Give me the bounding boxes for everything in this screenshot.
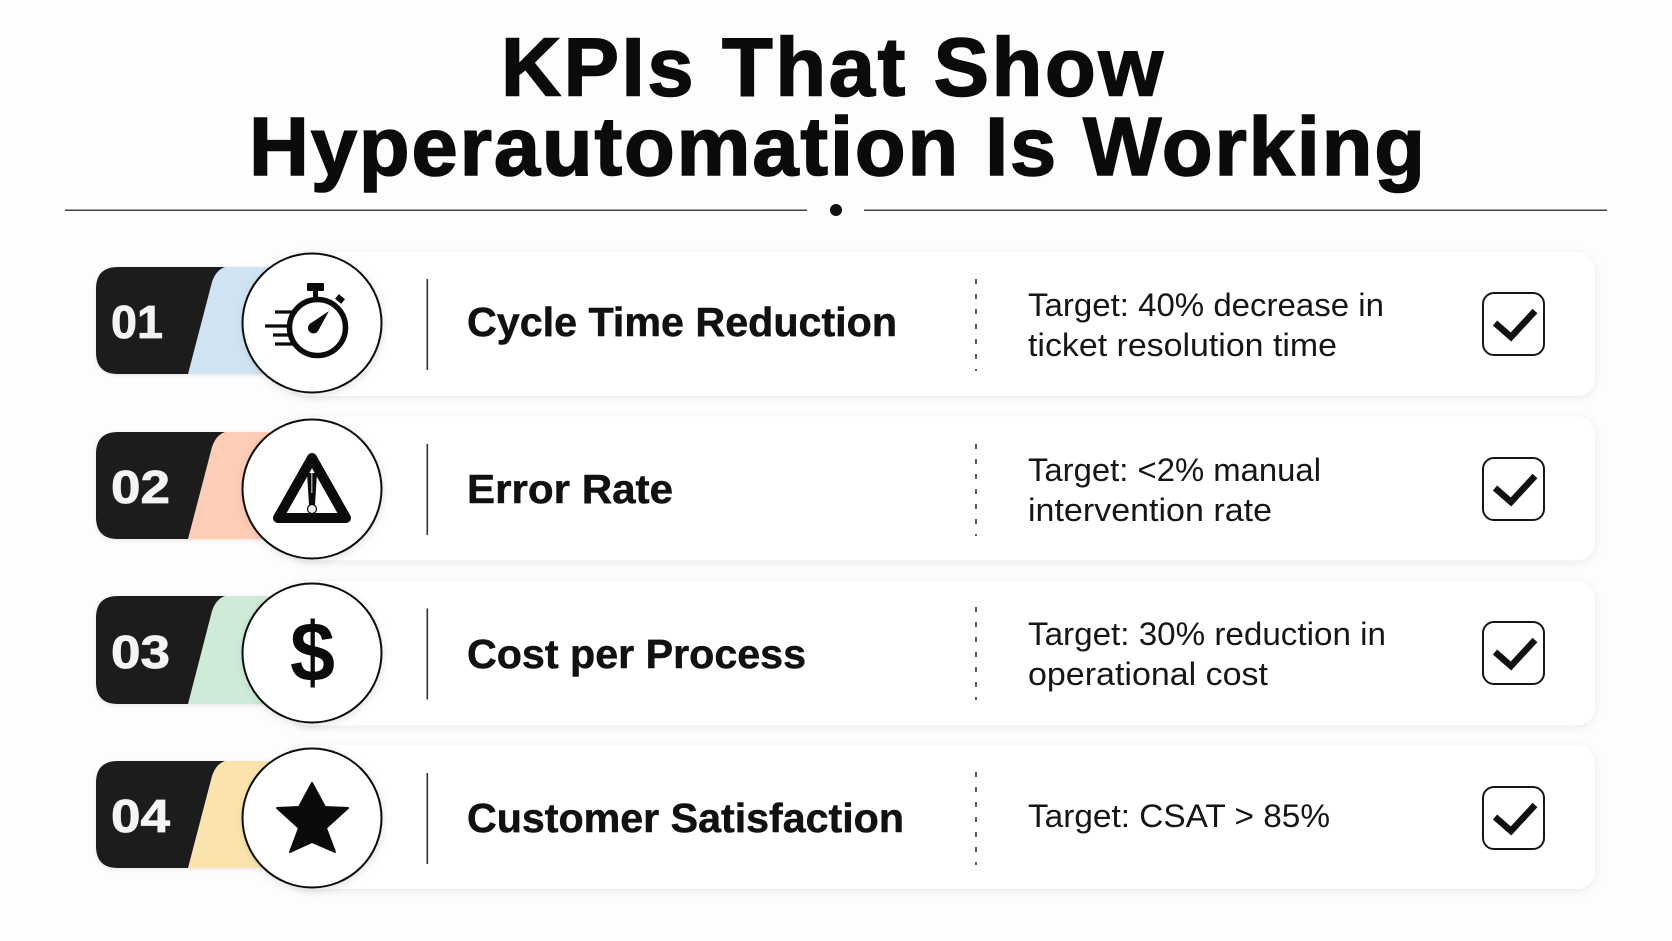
dashed divider	[975, 607, 977, 700]
title	[249, 20, 1425, 193]
icon: warning triangle	[242, 420, 382, 558]
dashed divider	[975, 772, 977, 865]
label: Cost per Process	[467, 631, 806, 677]
number badge 01: 01	[111, 296, 163, 348]
icon: checkbox	[1483, 622, 1544, 684]
icon: checkbox	[1483, 787, 1544, 849]
divider	[426, 773, 428, 864]
card 02	[290, 416, 1595, 560]
dashed divider	[975, 279, 977, 371]
label: Cycle Time Reduction	[467, 299, 897, 345]
target text: operational cost	[1028, 656, 1268, 692]
divider	[426, 608, 428, 700]
number badge 04: 04	[111, 790, 170, 842]
panel: KPI 02 error rate	[96, 416, 1595, 560]
card 03	[290, 581, 1595, 726]
icon: checkbox	[1483, 458, 1544, 520]
target text	[1028, 452, 1321, 528]
icon: checkbox	[1483, 293, 1544, 355]
label: Customer Satisfaction	[467, 795, 904, 841]
divider	[426, 444, 428, 535]
number badge 02	[96, 432, 312, 539]
card 04	[290, 745, 1595, 889]
icon: stopwatch	[242, 254, 382, 392]
target text	[1028, 287, 1384, 363]
title divider	[65, 204, 1607, 216]
icon: dollar sign	[242, 584, 382, 722]
divider	[426, 279, 428, 370]
card 01	[290, 252, 1595, 396]
icon: dollar sign: $	[290, 605, 335, 699]
number badge 04	[96, 761, 312, 868]
target text: Target: 40% decrease in	[1028, 287, 1384, 323]
dashed divider	[975, 444, 977, 536]
number badge 01	[96, 267, 312, 374]
icon: star	[242, 748, 382, 888]
title: Hyperautomation Is Working	[249, 100, 1425, 193]
number badge 03	[96, 596, 312, 704]
target text: ticket resolution time	[1028, 327, 1337, 363]
number badge 02: 02	[111, 461, 170, 513]
target text: Target: 30% reduction in	[1028, 616, 1386, 652]
target text: Target: <2% manual	[1028, 452, 1321, 488]
target text: Target: CSAT > 85%	[1028, 798, 1330, 834]
panel: KPI 04 customer satisfaction	[96, 745, 1595, 889]
target text	[1028, 616, 1386, 692]
title: KPIs That Show	[501, 20, 1163, 114]
label: Error Rate	[467, 466, 673, 512]
panel: KPI 03 cost per process	[96, 581, 1595, 726]
target text: intervention rate	[1028, 492, 1272, 528]
number badge 03: 03	[111, 626, 170, 678]
panel: KPI 01 cycle time reduction	[96, 252, 1595, 396]
